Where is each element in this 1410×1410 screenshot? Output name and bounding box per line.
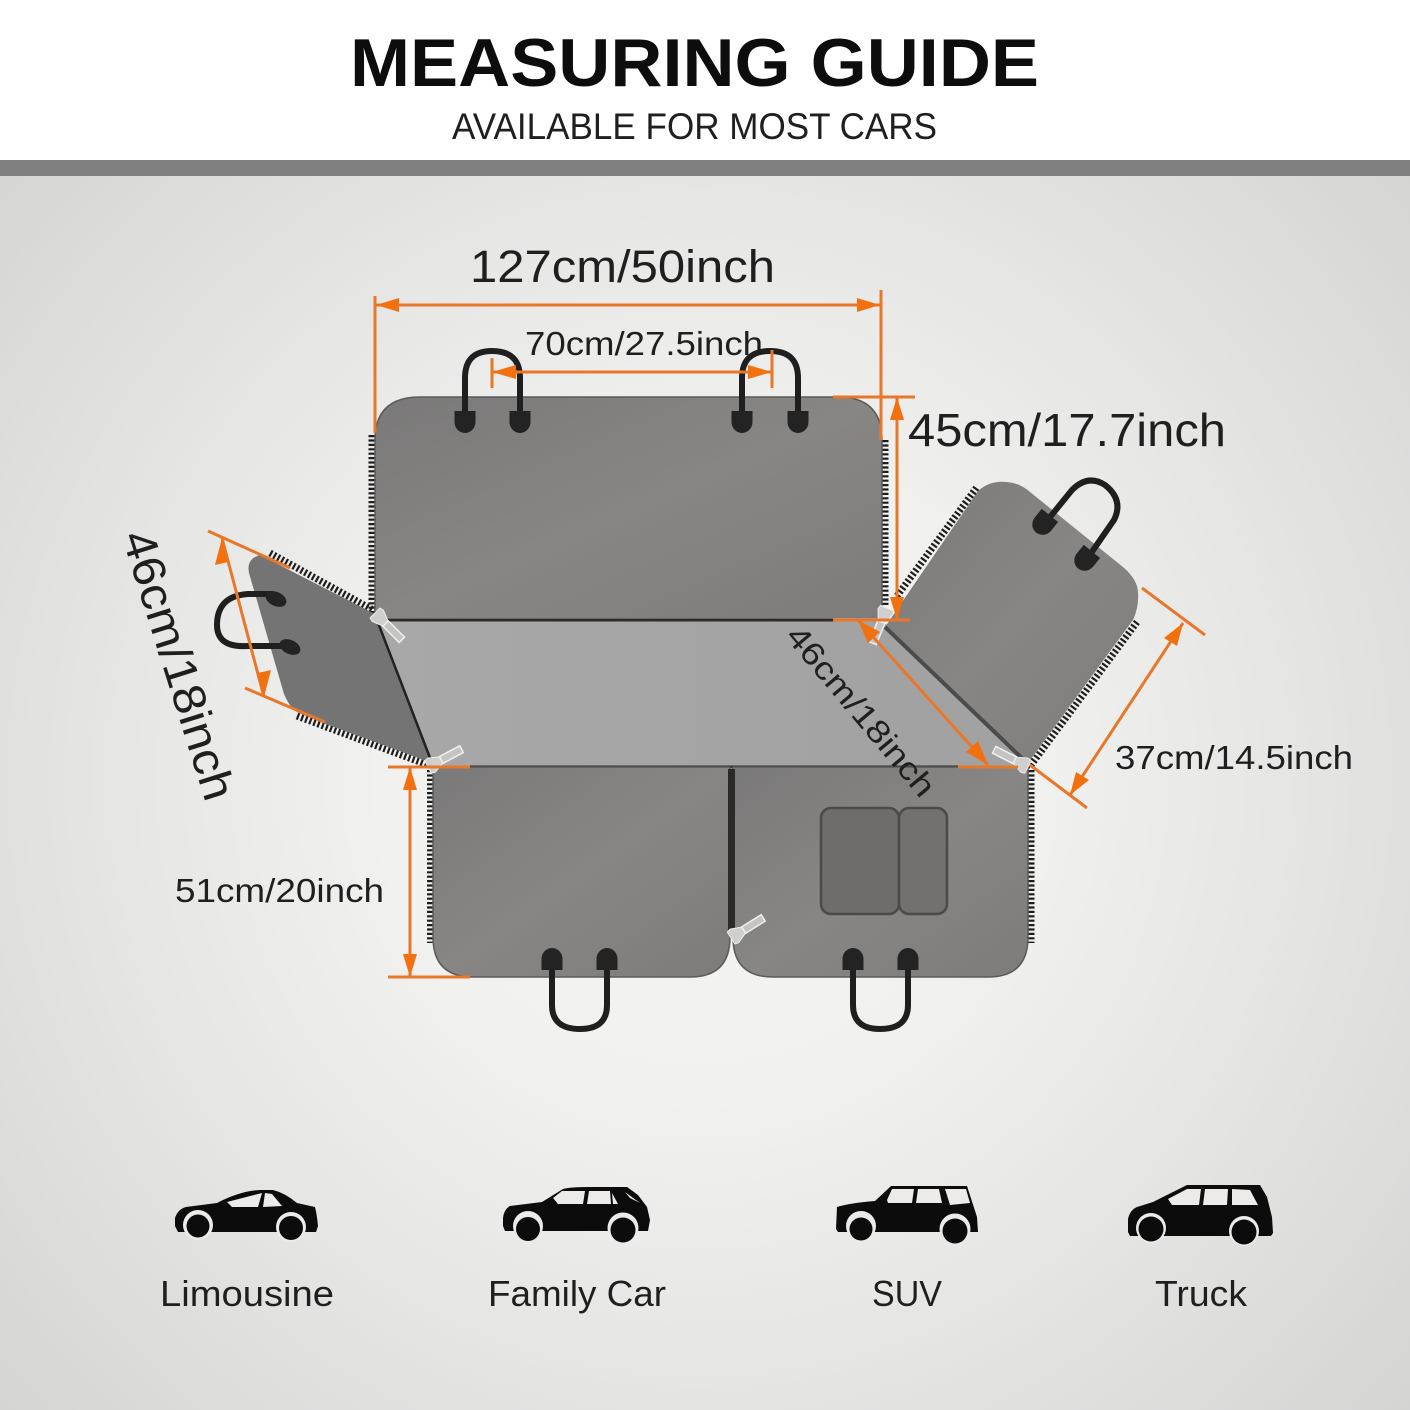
panel: left side flap	[248, 555, 432, 763]
label: 37cm/14.5inch: 37cm/14.5inch	[1115, 739, 1353, 776]
panel: seat base	[374, 618, 1030, 767]
header band	[0, 0, 1410, 176]
label: 70cm/27.5inch: 70cm/27.5inch	[525, 325, 763, 362]
dimension lines	[208, 290, 1205, 977]
label: SUV: SUV	[872, 1273, 942, 1314]
label: Family Car: Family Car	[488, 1273, 666, 1314]
label: Limousine: Limousine	[160, 1273, 334, 1314]
subtitle: AVAILABLE FOR MOST CARS	[452, 106, 937, 147]
title: MEASURING GUIDE	[350, 25, 1039, 101]
panel: front left flap	[433, 767, 730, 977]
arrowheads	[215, 298, 1183, 977]
right flap seam	[885, 627, 1028, 764]
label: 127cm/50inch: 127cm/50inch	[470, 241, 775, 292]
panel: pockets	[821, 808, 947, 914]
center zipper	[728, 769, 735, 930]
icon: limousine car	[175, 1190, 318, 1242]
seat cover diagram	[217, 351, 1138, 1029]
icon: SUV	[836, 1186, 978, 1244]
icon: family car	[503, 1187, 650, 1244]
label: 45cm/17.7inch: 45cm/17.7inch	[908, 404, 1226, 456]
icon: truck	[1128, 1185, 1273, 1246]
straps and anchors	[217, 351, 1117, 1029]
zipper teeth	[270, 435, 1137, 943]
panel: front right flap	[733, 767, 1028, 977]
left flap seam	[377, 620, 432, 763]
label: Truck: Truck	[1155, 1273, 1248, 1314]
panel: right side flap	[885, 482, 1138, 763]
label: center 46cm/18inch: 46cm/18inch	[779, 618, 943, 804]
seam lines	[376, 620, 1030, 767]
panel: back rest	[375, 397, 882, 620]
label: 51cm/20inch: 51cm/20inch	[175, 872, 384, 909]
zippers	[369, 605, 1032, 945]
label: left 46cm/18inch: 46cm/18inch	[112, 524, 246, 806]
